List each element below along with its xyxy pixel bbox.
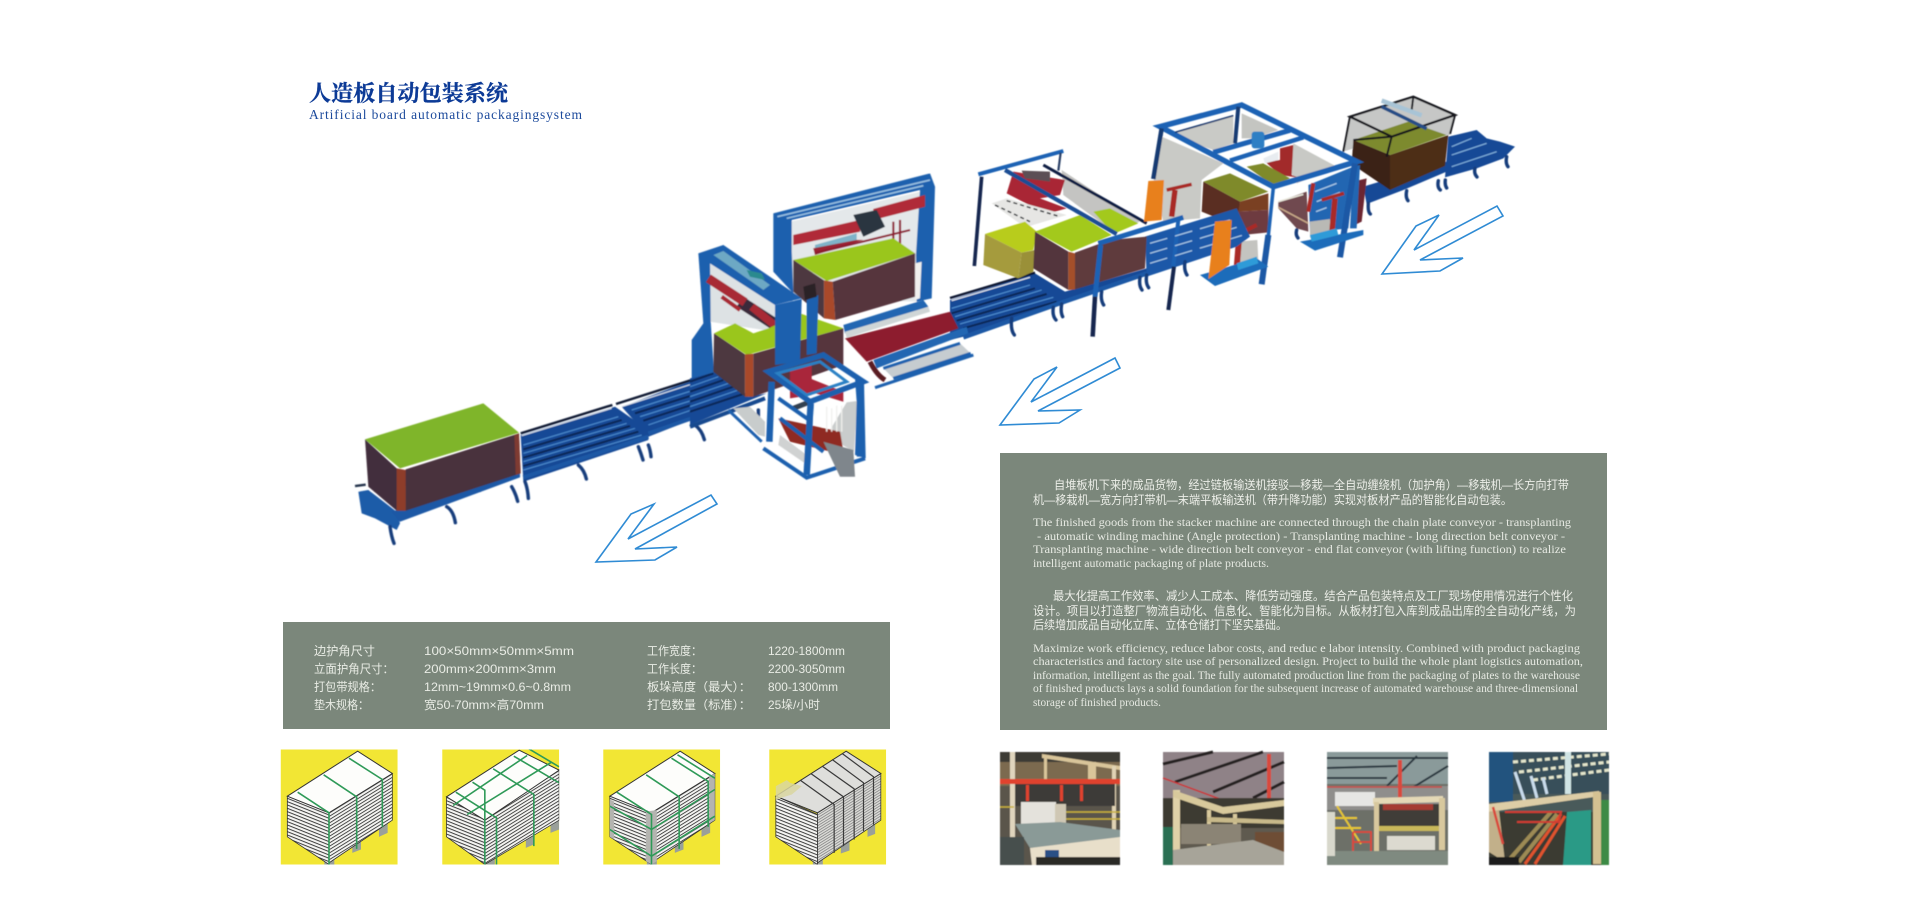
panel: machine specifications	[283, 622, 890, 729]
transplanting machine cage	[763, 355, 866, 478]
spec labels and values: 800-1300mm	[768, 680, 838, 694]
cage and box	[1343, 97, 1455, 190]
paragraph: goals english: characteristics and factory site use of personalized design. Project to build the whole plant logistics automation,	[1033, 656, 1583, 668]
icon: stack with wooden slats, thumbnail 4	[769, 750, 886, 864]
spec labels and values: 打包带规格：	[314, 679, 381, 694]
conveyor to first wrapper	[690, 372, 767, 442]
paragraph: goals english: storage of finished products.	[1033, 697, 1161, 709]
arrow: flow direction left	[596, 495, 717, 562]
panel: process description	[1000, 453, 1607, 730]
gantry rails and red gripper	[974, 151, 1147, 266]
long direction belt conveyor	[843, 300, 973, 388]
cube walls and blue back wall	[1153, 113, 1367, 238]
title: Artificial board automatic packagingsystem	[309, 107, 582, 122]
spec labels and values: 边护角尺寸	[314, 644, 375, 658]
arrow: flow direction middle	[1000, 358, 1120, 425]
spec labels and values: 板垛高度（最大）：	[647, 679, 751, 694]
rear wrapping gantry and box	[773, 173, 935, 320]
spec labels and values: 工作宽度：	[647, 643, 702, 658]
paragraph: goals english: information, intelligent as the goal. The fully automated production line from the packaging of plates to the warehouse	[1033, 670, 1580, 682]
spec labels and values: 打包数量（标准）：	[647, 697, 751, 712]
infographic canvas	[280, 82, 1610, 866]
paragraph: process chinese	[1033, 477, 1569, 507]
paragraph: process english: intelligent automatic packaging of plate products.	[1033, 558, 1269, 570]
paragraph: goals english	[1033, 643, 1583, 709]
paragraph: goals chinese	[1033, 588, 1576, 632]
paragraph: goals english: of finished products lays a solid foundation for the subsequent increase of automated warehouse and three-dimensional	[1033, 683, 1578, 695]
packaging line 3D illustration	[355, 97, 1515, 543]
spec labels and values: 垫木规格：	[314, 697, 369, 712]
title: 人造板自动包装系统	[309, 81, 509, 106]
box in cube	[1202, 163, 1290, 270]
spec labels and values: 工作长度：	[647, 661, 702, 676]
icon: stack with cross straps, thumbnail 2	[442, 748, 559, 864]
end conveyor and wrapping cage	[1343, 97, 1515, 214]
transplanter with boxes	[950, 151, 1250, 340]
paragraph: process chinese: 机—移栽机—宽方向打带机—末端平板输送机（带升降功能）实现对板材产品的智能化自动包装。	[1033, 492, 1512, 507]
photo: long view along conveyor line	[1489, 752, 1609, 865]
arrow: flow direction right	[1382, 206, 1503, 274]
paragraph: process english: The finished goods from the stacker machine are connected through the chain plate conveyor - transplanting	[1033, 517, 1571, 529]
finished box on conveyor	[355, 403, 521, 543]
paragraph: goals english: Maximize work efficiency, reduce labor costs, and reduc e labor intensity. Combined with product packaging	[1033, 643, 1580, 655]
paragraph: goals chinese: 后续增加成品自动化立库、立体仓储打下坚实基础。	[1033, 617, 1287, 632]
conveyors	[521, 369, 725, 498]
spec labels and values: 12mm~19mm×0.6~0.8mm	[424, 680, 571, 694]
conveyor under boxes	[950, 208, 1250, 340]
photo: factory hall with tan gantry	[1163, 752, 1284, 865]
paragraph: goals chinese: 最大化提高工作效率、减少人工成本、降低劳动强度。结合产品包装特点及工厂现场使用情况进行个性化	[1053, 588, 1573, 603]
title	[309, 81, 582, 122]
left conveyors and finished box	[355, 369, 725, 543]
photo: packaging line table and gantry	[1000, 752, 1120, 865]
paragraph: process english	[1033, 517, 1571, 570]
spec labels and values: 200mm×200mm×3mm	[424, 662, 556, 676]
spec labels and values	[314, 643, 845, 712]
orange posts	[1144, 180, 1232, 279]
photo: overhead gantry with yellow stairs	[1327, 752, 1448, 865]
blue frame beams and posts	[1153, 105, 1363, 286]
spec labels and values: 25垛/小时	[768, 697, 820, 712]
paragraph: goals chinese: 设计。项目以打造整厂物流自动化、信息化、智能化为目标。从板材打包入库到成品出库的全自动化产线，为	[1033, 603, 1576, 618]
spec labels and values: 100×50mm×50mm×5mm	[424, 644, 574, 658]
spec labels and values: 1220-1800mm	[768, 644, 845, 658]
icon: stack with corner guards and straps, thumbnail 3	[603, 750, 720, 864]
red transfer stands	[1167, 145, 1344, 235]
olive and green boxes	[983, 215, 1147, 290]
centre of packaging line	[690, 173, 973, 478]
paragraph: process english: - automatic winding machine (Angle protection) - Transplanting machine - long direction belt conveyor -	[1037, 531, 1565, 543]
end conveyor	[1363, 130, 1515, 214]
front frame and posts	[1005, 170, 1243, 337]
big cube frame	[1153, 105, 1367, 286]
paragraph: process english: Transplanting machine - wide direction belt conveyor - end flat conveyor (with lifting function) to realize	[1033, 544, 1566, 556]
spec labels and values: 2200-3050mm	[768, 662, 845, 676]
icon: stack with two-way corner straps, thumbnail 1	[281, 750, 398, 864]
spec labels and values: 立面护角尺寸：	[314, 661, 394, 676]
paragraph: process chinese: 自堆板机下来的成品货物，经过链板输送机接驳—移栽—全自动缠绕机（加护角）—移栽机—长方向打带	[1054, 477, 1569, 492]
spec labels and values: 宽50-70mm×高70mm	[424, 697, 544, 712]
first wrapping gantry and box	[692, 245, 843, 397]
